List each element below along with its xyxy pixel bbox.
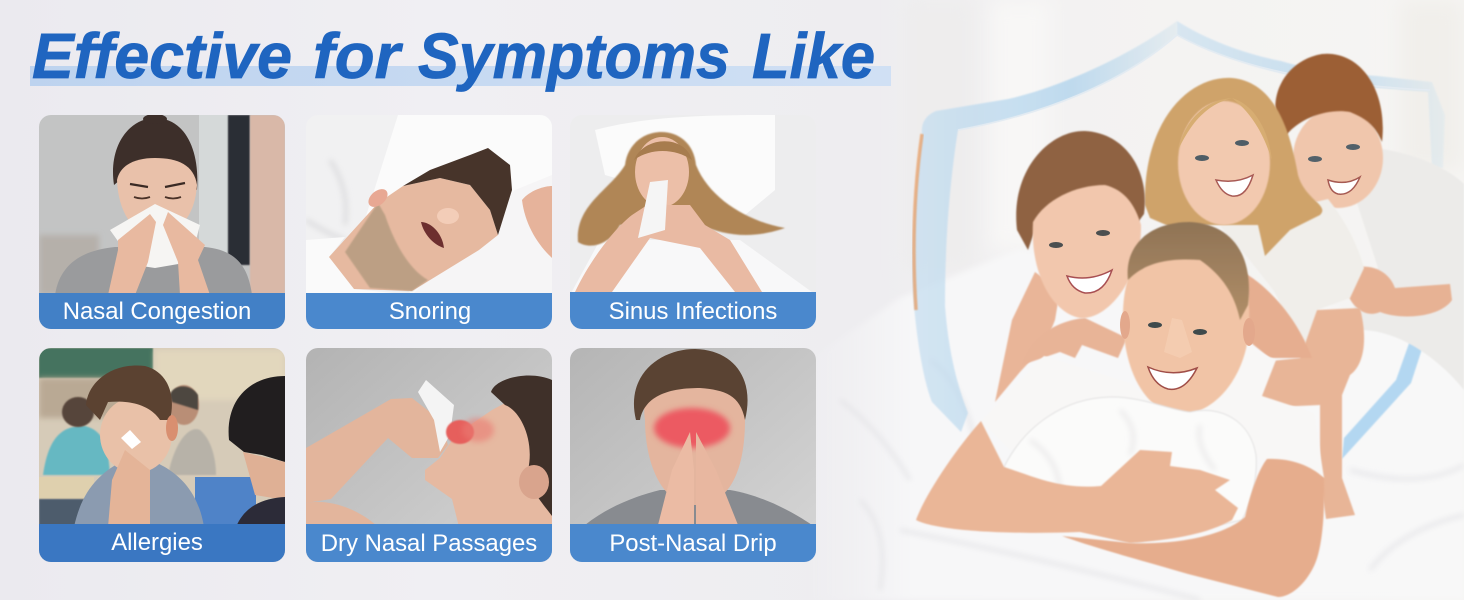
title text: Symptoms — [418, 20, 730, 92]
label band — [570, 292, 816, 329]
title underline band — [30, 66, 891, 86]
girl — [1145, 78, 1364, 519]
panel: post-nasal drip: Post-Nasal Drip — [609, 530, 777, 557]
panel: snoring: Snoring — [389, 298, 471, 325]
panel: snoring — [306, 115, 552, 329]
shield outline — [912, 21, 1445, 459]
panel: allergies: Allergies — [111, 529, 203, 556]
family photo — [916, 54, 1464, 597]
label band — [39, 293, 285, 329]
man — [916, 222, 1324, 597]
label band — [570, 524, 816, 562]
panel: allergies — [39, 348, 285, 562]
woman — [995, 131, 1312, 402]
label band — [306, 524, 552, 562]
boy — [1275, 54, 1464, 390]
panel: sinus infections: Sinus Infections — [609, 298, 777, 325]
panel: post-nasal drip — [570, 348, 816, 562]
bedroom photo — [810, 0, 1464, 600]
title text — [32, 20, 875, 92]
title text: for — [313, 20, 403, 92]
pillow — [1004, 397, 1256, 543]
panel: dry nasal passages — [306, 348, 552, 562]
panel: nasal congestion — [39, 114, 285, 329]
panel: nasal congestion: Nasal Congestion — [63, 298, 251, 325]
label band — [306, 293, 552, 329]
title text: Like — [752, 20, 875, 92]
panel: sinus infections — [570, 115, 816, 329]
title text: Effective — [32, 20, 292, 92]
label band — [39, 524, 285, 562]
arms — [916, 421, 1238, 543]
panel: dry nasal passages: Dry Nasal Passages — [321, 530, 537, 557]
title — [30, 20, 891, 92]
